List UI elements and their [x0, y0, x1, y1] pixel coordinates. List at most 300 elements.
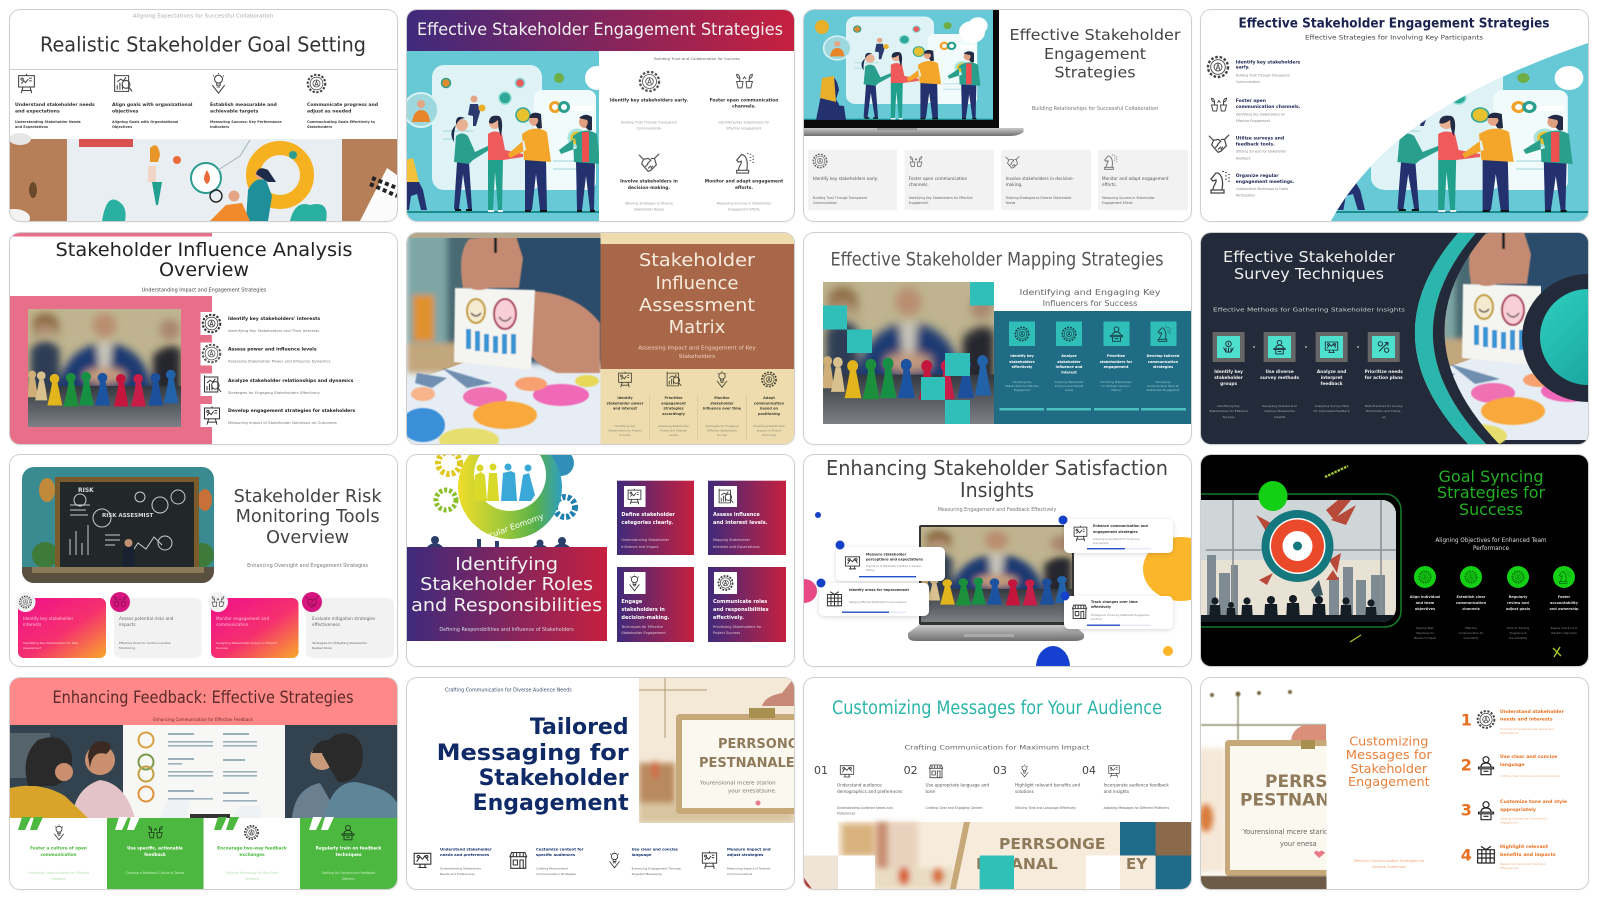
item 3: Strategies for Engaging Stakeholders Effectively	[228, 390, 321, 394]
item 1: Maximum Impact	[1414, 636, 1436, 640]
image: personal sign on clipboard: PERRS	[1265, 772, 1328, 792]
item 2: stakeholder	[1057, 360, 1081, 364]
image: personal sign on clipboard: Yourensional mcere staric	[1242, 828, 1328, 836]
item 4	[702, 846, 771, 876]
quote mark	[18, 816, 43, 830]
card 4: Evaluate mitigation strategies	[312, 616, 375, 621]
icon: chess knight	[1105, 155, 1117, 169]
item 3: Highlight relevant benefits and	[1015, 782, 1080, 787]
panel: Goal Syncing Strategies for Success	[1201, 455, 1588, 666]
tile 2: Mapping Stakeholder	[713, 538, 751, 542]
item 1: effectively	[1012, 364, 1033, 368]
icon: bulb	[54, 824, 64, 839]
title: Stakeholder	[479, 766, 629, 790]
header band: Effective Stakeholder Engagement Strategies	[417, 20, 783, 40]
title block: Identifying	[455, 554, 558, 575]
icon: monitor	[845, 557, 860, 569]
item 4	[300, 816, 397, 888]
item 4: based on	[760, 406, 778, 410]
icon: board	[619, 371, 631, 387]
image: personal sign on clipboard: your enesa	[1280, 840, 1317, 848]
item 2: Use diverse	[1265, 368, 1294, 374]
tile 1: Influence and Impact	[621, 545, 659, 549]
image: hand with smiley card	[407, 238, 600, 444]
icon: speaker	[1478, 801, 1494, 819]
item 2	[658, 371, 690, 436]
callout 1: Making	[866, 569, 875, 572]
title: Enhancing Stakeholder Satisfaction	[826, 456, 1168, 480]
callout 1: Measure stakeholder	[866, 553, 907, 557]
icon: gear	[762, 372, 776, 386]
title: Tailored	[530, 714, 629, 740]
item 4: engagement meetings.	[1236, 179, 1295, 185]
item 1: Stakeholders for Project	[608, 428, 643, 432]
item 1: communication	[40, 852, 77, 856]
image: personal sign on clipboard: PESTNAN	[1240, 790, 1330, 810]
item 2	[510, 846, 584, 876]
item 4: Adapting Messages for Different Platforms	[1104, 806, 1169, 810]
brown title block	[600, 244, 794, 368]
item 4: Incorporate audience feedback	[1104, 782, 1169, 787]
item 3: Tailoring Strategies to Diverse	[624, 201, 673, 205]
card 2: Assess potential risks and	[119, 616, 174, 621]
item 2: Customize content for	[536, 846, 584, 851]
image: personal sign on clipboard: Yourensional mcere starion	[699, 780, 776, 786]
item 4: Delivery	[342, 876, 355, 880]
title: Messaging for	[437, 740, 629, 766]
title block: and Responsibilities	[411, 595, 602, 616]
item 2: Effective Engagement	[726, 126, 762, 130]
item 2: Communication Strategies	[536, 872, 576, 876]
item 2: communication	[1456, 601, 1487, 605]
item 2: Analyzing Stakeholder	[1055, 380, 1084, 384]
quote mark	[115, 816, 140, 830]
pink block	[10, 232, 212, 444]
item 3	[610, 846, 681, 876]
item 3: Analyze stakeholder relationships and dynamics	[228, 378, 354, 384]
icon: gear	[1062, 327, 1076, 340]
title: Effective Stakeholder Engagement Strategies	[1238, 16, 1550, 31]
callout 2: Designing Effective Stakeholder Survey Questions	[849, 601, 907, 604]
item 2: channels.	[732, 104, 756, 110]
item 3: feedback tools.	[1236, 141, 1275, 147]
subtitle: Diverse Audiences	[1372, 864, 1406, 868]
item 3: Feedback	[245, 876, 260, 880]
brown title block: Matrix	[669, 316, 726, 338]
item 4	[1461, 844, 1556, 870]
title	[234, 486, 382, 548]
teal squares	[823, 282, 994, 424]
item 4: Foster	[1558, 595, 1571, 599]
image: personal sign on clipboard: your enesatsune.	[728, 788, 777, 794]
icon: board	[628, 489, 641, 504]
icon: gear trophy	[308, 75, 325, 92]
item 4	[1211, 171, 1295, 198]
item 2: Power and Interest	[660, 428, 688, 432]
item 1: Building Trust Through Transparent	[1236, 73, 1291, 77]
item 2: Establish clear	[1457, 595, 1486, 599]
item 3: Utilizing Technology for Real-Time	[226, 870, 278, 874]
item 3	[210, 73, 282, 129]
item 1: Identify key stakeholders early.	[610, 98, 688, 104]
title block	[407, 547, 607, 641]
item 2: Insights	[1274, 414, 1286, 418]
item 2: Aligning Goals with Organizational	[112, 120, 178, 124]
subtitle: Effective Methods for Gathering Stakeholder Insights	[1213, 307, 1405, 313]
card 3: Monitor engagement and	[216, 616, 269, 621]
item 4: Communication Plans for	[1147, 384, 1180, 388]
item 2: Levels	[1065, 388, 1074, 392]
callout 4: Strategies for Enhancing Stakeholder Engagement	[1091, 614, 1149, 617]
item 1	[200, 312, 320, 334]
card 4: Related Risks	[312, 646, 333, 650]
item 3: Prioritizing Stakeholders	[1100, 380, 1132, 384]
title: Survey Techniques	[1234, 264, 1384, 282]
item 3: Engagement	[1500, 820, 1519, 824]
item 3: 3	[1461, 800, 1472, 819]
item 4: and ownership	[1549, 607, 1579, 611]
icon: figure	[610, 851, 619, 867]
callout 4: and Trust	[1091, 618, 1102, 621]
item 2: Align goals with organizational	[112, 102, 193, 108]
item 1: Needs and Preferences	[440, 872, 475, 876]
item 3: Strategies for Engaging	[705, 424, 739, 428]
panel: Stakeholder Risk Monitoring Tools Overview	[10, 455, 397, 666]
tile 2: Interests and Expectations	[713, 545, 760, 549]
item 4: adjust as needed	[307, 109, 351, 115]
card 2: Monitoring	[119, 646, 135, 650]
item 3	[200, 373, 354, 396]
title: Messages for	[1346, 748, 1433, 762]
item 4: 4	[1461, 845, 1472, 864]
item 2: Crafting Clear and Concise Communication	[1500, 774, 1561, 778]
item 4: Measuring Impact and Feedback	[1500, 862, 1546, 866]
item 1: Enhancing Communication for Effective	[28, 870, 89, 874]
tile 1: Understanding Stakeholder	[621, 538, 670, 542]
image: sign photo collage: PTNANAL	[976, 854, 1058, 872]
item 3: 03	[993, 764, 1007, 776]
brown title block: Stakeholder	[639, 250, 756, 270]
image: circular economy wheel: Circular Eomomy	[477, 512, 545, 544]
item 4: Regular Check-ins to	[1551, 626, 1578, 630]
header band: Enhancing Feedback: Effective Strategies	[52, 688, 354, 708]
item 2: Foster open communication	[909, 176, 967, 181]
subtitle: Building Trust and Collaboration for Success	[654, 56, 740, 61]
card 1: Identify key stakeholder	[23, 616, 74, 621]
tile 3	[617, 567, 694, 642]
callout 3: Enhance communication and	[1093, 524, 1148, 528]
title: Insights	[960, 478, 1034, 502]
title: Monitoring Tools	[236, 506, 380, 527]
panel: Effective Stakeholder Engagement Strategies (curve)	[1201, 10, 1588, 221]
item 4: communication	[754, 401, 785, 405]
subtitle: Influencers for Success	[1043, 298, 1137, 308]
icon: presentation board	[19, 74, 34, 93]
item 2	[710, 74, 778, 130]
item 3: feedback	[1321, 380, 1343, 386]
item 1: stakeholder power	[607, 401, 644, 405]
image: laptop with pawns photo	[908, 525, 1084, 641]
item 4: strategies	[1153, 364, 1173, 368]
item 1	[1461, 708, 1565, 734]
item 4: Highlight relevant	[1500, 844, 1549, 850]
item 3: Utilize surveys and	[1236, 135, 1284, 141]
item 3	[1209, 135, 1287, 160]
tile 1: categories clearly.	[621, 520, 673, 526]
item 4	[753, 372, 786, 436]
item 4: Training for Constructive Feedback	[321, 870, 376, 874]
item 3: exchanges	[239, 852, 265, 856]
title block: Defining Responsibilities and Influence of Stakeholders	[439, 627, 574, 633]
item 3	[703, 370, 742, 436]
card 1: Identifying Key Stakeholders for Risk	[23, 641, 78, 645]
tile 4: Project Success	[713, 631, 740, 635]
item 2: influence and	[1056, 364, 1083, 368]
icon: gear	[1478, 711, 1494, 727]
panel: Effective Stakeholder Mapping Strategies	[804, 232, 1191, 444]
item 2: Identifying Key Stakeholders for	[1236, 112, 1286, 116]
item 3: Enhancing Engagement Through	[632, 866, 681, 870]
icon: speaker	[1274, 340, 1285, 353]
panel: Effective Stakeholder Survey Techniques	[1201, 232, 1588, 444]
title: Stakeholder Influence Analysis	[56, 238, 352, 260]
item 2: Objectives	[112, 125, 132, 129]
item 3: Groups	[717, 432, 728, 436]
tile 4	[708, 567, 786, 642]
item 2: feedback	[144, 852, 166, 856]
item 1	[808, 150, 897, 210]
item 1: Foster a culture of open	[30, 845, 87, 850]
card 2: impacts	[119, 622, 136, 627]
item 4	[1098, 150, 1188, 210]
title: Strategies for	[1437, 483, 1545, 502]
callout 3: Analyzing Survey Results for Continuous	[1093, 538, 1140, 541]
item 2: Identifying Key Stakeholders for Effective	[909, 196, 973, 200]
item 1	[414, 846, 492, 876]
card 2: Effective Tools for Continuous Risk	[119, 641, 171, 645]
image: team with pawns	[823, 282, 994, 424]
item 2: Assessing Stakeholder Power and Influence Dynamics	[228, 358, 330, 363]
item 4: Monitor and adapt engagement	[1102, 176, 1169, 181]
subtitle: Crafting Communication for Maximum Impact	[904, 744, 1090, 751]
item 1: 01	[814, 764, 828, 776]
image: risk assessment blackboard	[22, 467, 214, 583]
icon: handshake	[639, 154, 659, 171]
callout 4	[1060, 592, 1173, 629]
title: Strategies	[1054, 64, 1136, 82]
card 4	[302, 592, 394, 658]
item 1: Understand stakeholder needs	[15, 102, 95, 108]
item 3: solutions	[1015, 788, 1034, 794]
item 1: Feedback	[51, 876, 66, 880]
item 3: review and	[1507, 601, 1529, 605]
card 3: Success	[216, 646, 229, 650]
item 4: Monitor and adapt engagement	[705, 179, 783, 185]
card 2	[110, 592, 202, 658]
item 3: Utilizing Appropriate Channels for	[1500, 816, 1548, 820]
item 4: communication	[1148, 360, 1179, 364]
icon: monitor	[1325, 342, 1338, 352]
item 1: groups	[1220, 380, 1237, 386]
item 3: for Strategic Decision-	[1102, 384, 1131, 388]
item 3: interpret	[1321, 374, 1342, 380]
image: personal sign on clipboard	[639, 678, 801, 822]
item 2: Use specific, actionable	[127, 845, 183, 850]
item 3: Prioritize	[1107, 354, 1126, 358]
icon: head gear	[1512, 571, 1524, 583]
item 2	[905, 150, 994, 210]
item 4: Adapt	[763, 396, 775, 400]
item 1	[15, 74, 95, 129]
icon: chart	[115, 74, 132, 91]
item 1: Understanding Stakeholder Needs and	[1500, 726, 1554, 730]
icon: handshake	[1006, 156, 1019, 168]
item 3	[1506, 566, 1530, 640]
item 2: Assessing Stakeholder	[658, 424, 690, 428]
subtitle: Aligning Expectations for Successful Collaboration	[133, 14, 274, 20]
image: risk assessment blackboard: RISK ASSESMIST	[102, 513, 154, 519]
panel: Customizing Messages for Your Audience	[804, 678, 1191, 888]
item 3: Involve stakeholders in	[620, 179, 678, 185]
subtitle: Performance	[1473, 546, 1510, 552]
item 4: Develop engagement strategies for stakeholders	[228, 408, 355, 414]
title: Realistic Stakeholder Goal Setting	[40, 33, 366, 57]
panel: Stakeholder Influence Analysis Overview	[10, 232, 397, 444]
item 4: efforts.	[735, 185, 753, 191]
item 1	[607, 371, 644, 436]
title: Success	[1459, 500, 1523, 519]
tile 3: Engage	[621, 599, 643, 605]
item 2: 2	[1461, 755, 1472, 774]
quote mark	[309, 816, 334, 830]
item 3	[1094, 321, 1139, 410]
item 1: Building Trust Through Transparent	[621, 120, 678, 124]
item 1: Identify	[617, 396, 633, 400]
callout 2	[816, 578, 929, 616]
item 4: Communicating Goals Effectively to	[307, 120, 376, 124]
item 2: specific audiences	[536, 852, 576, 856]
image: target with skyline	[1187, 494, 1401, 627]
item 1: needs and interests	[1500, 716, 1553, 722]
item 1: Objectives for	[1416, 631, 1435, 635]
item 1: Identifying Key	[615, 424, 636, 428]
subtitle: Crafting Communication for Diverse Audience Needs	[445, 687, 572, 693]
callout 4: Track changes over time	[1091, 600, 1138, 604]
item 2: strategies	[663, 406, 684, 410]
item 3: Establish measurable and	[210, 102, 277, 108]
item 1: Preferences	[837, 811, 856, 815]
panel: Effective Stakeholder Engagement Strategies (laptop)	[804, 10, 1191, 221]
icon: clipboard	[702, 851, 717, 868]
item 4: Measure impact and	[727, 846, 771, 851]
item 2: Analyze	[1061, 354, 1077, 358]
item 4: Engagement Efforts	[728, 208, 760, 212]
icon: gear	[813, 154, 827, 168]
icon: plants	[1212, 98, 1226, 111]
subtitle: Identifying and Engaging Key	[1020, 286, 1161, 296]
item 4: Communications	[727, 872, 753, 876]
tile 4: effectively.	[713, 615, 744, 621]
item 2	[1456, 566, 1487, 640]
icon: plants	[910, 157, 922, 167]
image: team illustration	[407, 51, 599, 221]
item 1: early.	[1236, 65, 1250, 71]
item 4: Prioritize needs	[1365, 368, 1403, 374]
icon: chart	[204, 375, 221, 392]
panel: Stakeholder Influence Assessment Matrix	[407, 232, 794, 444]
item 1: demographics and preferences	[837, 788, 902, 794]
item 1: Communication	[813, 201, 837, 205]
subtitle: Enhancing Oversight and Engagement Strategies	[247, 563, 369, 569]
subtitle	[1435, 538, 1547, 552]
title	[1223, 248, 1396, 282]
item 1: Success	[619, 432, 631, 436]
squiggle accents	[1325, 466, 1561, 657]
image: risk assessment blackboard: RISK	[78, 487, 94, 494]
item 3: language	[632, 852, 652, 856]
item 3: decision-making.	[628, 185, 670, 191]
card 3	[208, 592, 298, 658]
icon: gear	[1465, 571, 1477, 583]
icon: gear	[203, 344, 220, 362]
callout 3: engagement strategies	[1093, 530, 1138, 534]
title block: Stakeholder Roles	[420, 574, 593, 595]
item 3	[204, 816, 300, 888]
subtitle	[1354, 858, 1425, 868]
title	[437, 714, 629, 816]
item 1: stakeholders	[1009, 360, 1035, 364]
item 3: Analyzing Survey Data	[1315, 404, 1349, 408]
item 3: Measuring Success: Key Performance	[210, 120, 282, 124]
tile 2: Assess influence	[713, 512, 760, 518]
tile 4: Prioritizing Stakeholders for	[713, 625, 762, 629]
item 2: survey methods	[1260, 374, 1299, 380]
icon: chess knight	[1211, 171, 1229, 193]
item 4: Participation	[1236, 194, 1255, 198]
item 1: Communication	[636, 126, 662, 130]
item 1	[1000, 321, 1044, 410]
item 2: channels.	[909, 182, 929, 187]
icon: percent	[1378, 341, 1389, 352]
item 2: Engagement	[909, 201, 929, 205]
item 3: Tailoring Strategies to Diverse Stakeholder	[1005, 196, 1072, 200]
item 1: 1	[1461, 710, 1472, 729]
item 4: Impact on Project	[757, 428, 782, 432]
icon: handshake	[1209, 135, 1229, 152]
item 2: Foster open	[1236, 98, 1266, 104]
decorative blobs	[791, 512, 1219, 688]
item 2	[1260, 332, 1299, 418]
item 4: Measuring Impact of Stakeholder Decisions on Outcomes	[228, 420, 337, 424]
item 1: Stakeholders for Effective	[1005, 384, 1039, 388]
item 4: 04	[1082, 764, 1096, 776]
item 1: Engagement	[1014, 388, 1030, 392]
item 3: Needs	[1006, 201, 1016, 205]
item 4: Stakeholders	[307, 125, 332, 129]
item 4: up	[1382, 414, 1386, 418]
item 1: Identify key	[1214, 368, 1243, 374]
item 1	[10, 816, 107, 888]
item 3: Making	[1111, 388, 1121, 392]
item 2: Use appropriate language and	[926, 782, 989, 787]
item 2	[1212, 98, 1301, 123]
title	[1010, 26, 1181, 82]
item 1	[610, 72, 688, 130]
item 3: stakeholders for	[1100, 360, 1132, 364]
item 3: Tools for Tracking	[1507, 626, 1530, 630]
item 3	[620, 154, 678, 212]
item 3: stakeholder	[710, 401, 734, 405]
